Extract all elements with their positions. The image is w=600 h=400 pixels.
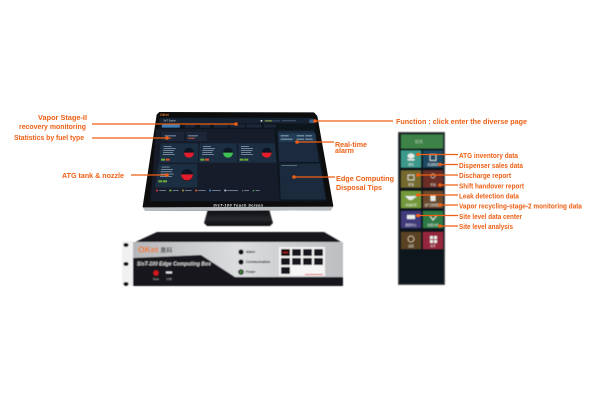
mute button: Mute bbox=[153, 277, 159, 281]
top status bar bbox=[159, 118, 315, 123]
status indicators bbox=[238, 249, 270, 275]
callout: shift handover report bbox=[438, 182, 524, 190]
tile captions: 油气回收数据 bbox=[425, 203, 442, 207]
callout: site level analysis: Site level analysis bbox=[459, 222, 513, 231]
callout: vapor stage-ii recovery monitoring: recovery monitoring bbox=[19, 122, 86, 131]
callout: real-time alarm: Real-time bbox=[335, 140, 367, 149]
rack ears bbox=[122, 241, 134, 286]
function button bbox=[309, 119, 314, 123]
tile captions: 罐存 bbox=[408, 162, 414, 166]
screen background bbox=[149, 117, 327, 202]
callout: site level data center bbox=[416, 212, 522, 221]
product name: SisT-100 Edge Computing Box bbox=[137, 262, 211, 268]
callout: vapor stage-ii recovery monitoring bbox=[19, 113, 238, 131]
callout: function: Function : click enter the diverse page bbox=[396, 117, 527, 126]
rack brushed front bbox=[133, 242, 343, 278]
banner label: 综合 bbox=[415, 138, 423, 144]
callout: function bbox=[313, 117, 527, 126]
chin with model name bbox=[143, 204, 333, 211]
usb port bbox=[166, 272, 172, 281]
chin with model name: SisT-100 Touch Screen bbox=[213, 204, 264, 208]
callout: discharge report: Discharge report bbox=[459, 171, 511, 180]
tank card 1 bbox=[159, 143, 198, 163]
tile icons bbox=[405, 154, 437, 243]
tile: dispenser bbox=[423, 150, 443, 168]
tank card 2 bbox=[199, 143, 237, 163]
callout: discharge report bbox=[416, 171, 511, 180]
tile: shift handover bbox=[423, 170, 443, 188]
phone frame bbox=[398, 132, 444, 284]
status indicators: Communication bbox=[246, 260, 270, 264]
tile captions: 站级分析 bbox=[427, 223, 439, 227]
tile captions: 卸油 bbox=[408, 182, 414, 186]
menu banner bbox=[401, 134, 443, 148]
edge computing box bbox=[122, 232, 343, 286]
tank card 4 bbox=[155, 164, 197, 187]
statistics by fuel type cards bbox=[162, 132, 207, 141]
tile: data center bbox=[401, 211, 421, 228]
alarm panel bbox=[278, 131, 319, 162]
callout: atg tank & nozzle: ATG tank & nozzle bbox=[62, 171, 124, 180]
monitor bezel bbox=[143, 112, 333, 211]
callout: leak detection data: Leak detection data bbox=[459, 192, 520, 200]
tile captions: 关于 bbox=[430, 244, 436, 248]
status indicators: Power bbox=[246, 270, 256, 274]
keypad bbox=[279, 247, 325, 276]
rack top face bbox=[133, 232, 343, 243]
tile captions bbox=[405, 162, 442, 248]
monitor stand bbox=[204, 209, 273, 226]
disposal tips panel bbox=[279, 163, 326, 200]
tile: discharge bbox=[401, 170, 421, 188]
tile: site analysis bbox=[423, 211, 443, 228]
callout: statistics by fuel type: Statistics by fuel type bbox=[14, 133, 84, 142]
callout: dispenser sales data bbox=[438, 161, 524, 170]
callout: site level data center: Site level data center bbox=[459, 212, 522, 221]
callout: statistics by fuel type bbox=[14, 133, 169, 142]
callout: atg inventory data bbox=[416, 151, 519, 160]
callout: vapor stage-ii recovery monitoring: Vapor Stage-II bbox=[38, 113, 87, 122]
screen logo: OKet bbox=[160, 113, 170, 117]
callout: dispenser sales data: Dispenser sales data bbox=[459, 161, 524, 170]
callout: atg tank & nozzle bbox=[62, 171, 169, 180]
tile: settings bbox=[401, 232, 421, 249]
callout: edge computing disposal tips: Edge Computing bbox=[336, 174, 394, 183]
screen legend bbox=[156, 190, 260, 191]
callout: site level analysis bbox=[438, 222, 513, 231]
top status bar: SisT Station bbox=[163, 120, 177, 123]
tile: leak detection bbox=[401, 191, 421, 208]
usb port: USB bbox=[166, 277, 172, 281]
tile: about bbox=[423, 232, 443, 249]
callout: edge computing disposal tips: Disposal Tips bbox=[336, 183, 382, 192]
brand logo: OKet 奥科 bbox=[138, 244, 172, 254]
rack dark lower band bbox=[133, 255, 343, 286]
tab row bbox=[162, 124, 276, 128]
callout: real-time alarm bbox=[295, 140, 367, 155]
callout: real-time alarm: alarm bbox=[335, 146, 354, 155]
tile captions: 加油数据 bbox=[427, 162, 439, 166]
callout: vapor recycling-stage-2 monitoring data: Vapor recycling-stage-2 monitoring data bbox=[459, 202, 583, 210]
tile: vapor recycling bbox=[423, 191, 443, 208]
mobile app menu bbox=[398, 132, 444, 284]
tile captions: 交班 bbox=[430, 182, 436, 186]
callout: shift handover report: Shift handover report bbox=[459, 182, 524, 190]
status indicators: Alarm bbox=[246, 250, 255, 254]
tank card 3 bbox=[238, 143, 277, 163]
tile: tank inventory bbox=[401, 150, 421, 168]
monitor: touch screen bbox=[143, 112, 333, 211]
tile captions: 设置 bbox=[408, 244, 414, 248]
main content panel bbox=[151, 129, 280, 201]
tile captions: 渗漏检测 bbox=[405, 203, 417, 207]
callout: edge computing disposal tips bbox=[292, 174, 394, 192]
tile captions: 数据中心 bbox=[405, 223, 417, 227]
callout: leak detection data bbox=[416, 192, 520, 200]
callout: atg inventory data: ATG inventory data bbox=[459, 151, 519, 160]
mute button bbox=[153, 270, 159, 281]
